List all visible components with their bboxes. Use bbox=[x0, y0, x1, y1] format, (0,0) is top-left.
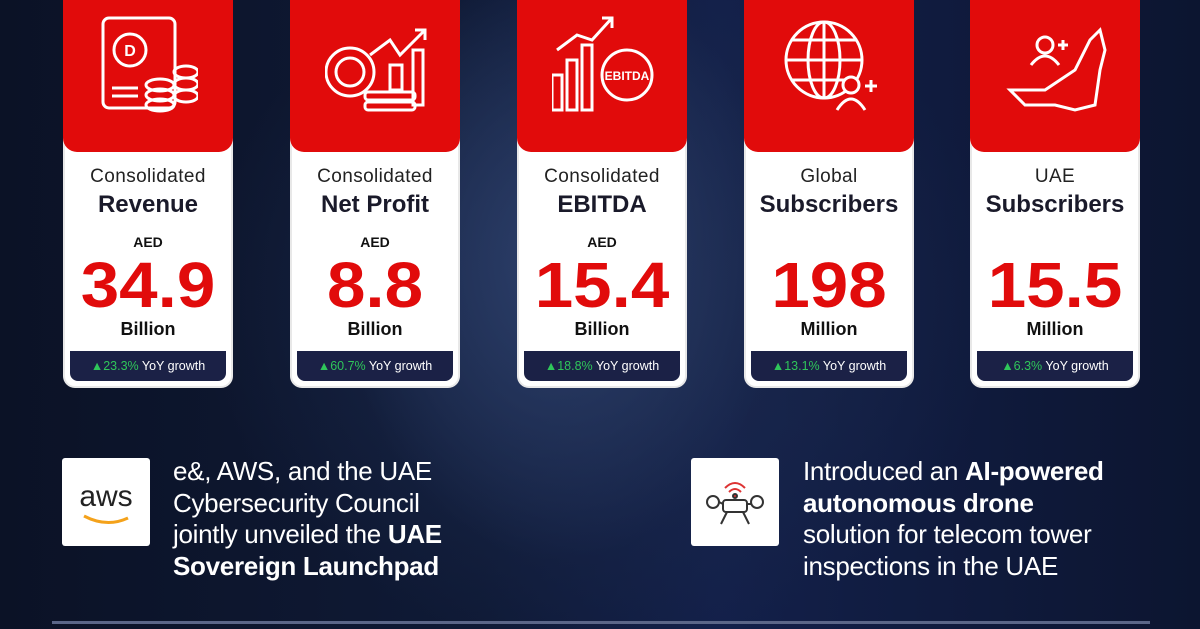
text: AWS announcement: Cybersecurity Council bbox=[173, 488, 420, 518]
text: AWS announcement: Sovereign Launchpad bbox=[173, 550, 439, 580]
icon: revenue: D bbox=[124, 43, 136, 60]
card: global subscribers bbox=[744, 0, 914, 388]
card: EBITDA: 15.4 bbox=[535, 249, 669, 321]
card: revenue: Consolidated bbox=[90, 166, 206, 187]
icon: EBITDA: EBITDA bbox=[605, 69, 650, 83]
text: AWS announcement: jointly unveiled the UAE bbox=[173, 519, 442, 549]
icon: drone bbox=[691, 458, 779, 546]
icon: globe bbox=[744, 0, 914, 152]
growth badge bbox=[522, 349, 682, 383]
card: UAE subscribers: Million bbox=[1026, 319, 1084, 339]
growth badge bbox=[295, 349, 455, 383]
card: global subscribers: 198 bbox=[771, 249, 887, 321]
growth badge bbox=[975, 349, 1135, 383]
card: revenue: AED bbox=[133, 234, 163, 250]
growth badge: ▲60.7% YoY growth bbox=[318, 359, 432, 373]
card: net profit: Consolidated bbox=[317, 166, 433, 187]
icon: EBITDA bbox=[517, 0, 687, 152]
icon: revenue bbox=[63, 0, 233, 152]
card: EBITDA bbox=[517, 0, 687, 388]
card: EBITDA: Consolidated bbox=[544, 166, 660, 187]
card: UAE subscribers: Subscribers bbox=[986, 191, 1124, 218]
icon: aws logo bbox=[62, 458, 150, 546]
growth badge: ▲23.3% YoY growth bbox=[91, 359, 205, 373]
card: net profit: Net Profit bbox=[321, 191, 429, 218]
card: EBITDA: EBITDA bbox=[557, 191, 647, 218]
growth badge: ▲13.1% YoY growth bbox=[772, 359, 886, 373]
text: drone announcement: Introduced an AI-powered bbox=[803, 456, 1104, 486]
card: UAE subscribers: 15.5 bbox=[988, 249, 1122, 321]
icon: aws logo: aws bbox=[79, 480, 133, 513]
card: revenue: Billion bbox=[120, 319, 176, 339]
text: drone announcement bbox=[803, 456, 1104, 580]
card: UAE subscribers: UAE bbox=[1035, 166, 1075, 187]
card: EBITDA: Billion bbox=[574, 319, 630, 339]
card: global subscribers: Global bbox=[800, 166, 858, 187]
card: net profit: 8.8 bbox=[327, 249, 423, 321]
text: AWS announcement bbox=[172, 456, 442, 580]
text: AWS announcement: e&, AWS, and the UAE bbox=[173, 456, 432, 486]
text: drone announcement: inspections in the UAE bbox=[803, 550, 1058, 580]
growth badge: ▲6.3% YoY growth bbox=[1001, 359, 1109, 373]
text: drone announcement: solution for telecom tower bbox=[803, 519, 1091, 549]
card: revenue bbox=[63, 0, 233, 388]
card: EBITDA: AED bbox=[587, 234, 617, 250]
card: global subscribers: Subscribers bbox=[760, 191, 898, 218]
growth badge bbox=[68, 349, 228, 383]
icon: net profit bbox=[290, 0, 460, 152]
growth badge bbox=[749, 349, 909, 383]
card: net profit: Billion bbox=[348, 319, 402, 339]
text: drone announcement: autonomous drone bbox=[803, 488, 1034, 518]
card: revenue: Revenue bbox=[98, 191, 198, 218]
card: net profit: AED bbox=[360, 234, 390, 250]
card: global subscribers: Million bbox=[800, 319, 858, 339]
icon: UAE map bbox=[970, 0, 1140, 152]
card: revenue: 34.9 bbox=[81, 249, 215, 321]
card: net profit bbox=[290, 0, 460, 388]
card: UAE subscribers bbox=[970, 0, 1140, 388]
growth badge: ▲18.8% YoY growth bbox=[545, 359, 659, 373]
